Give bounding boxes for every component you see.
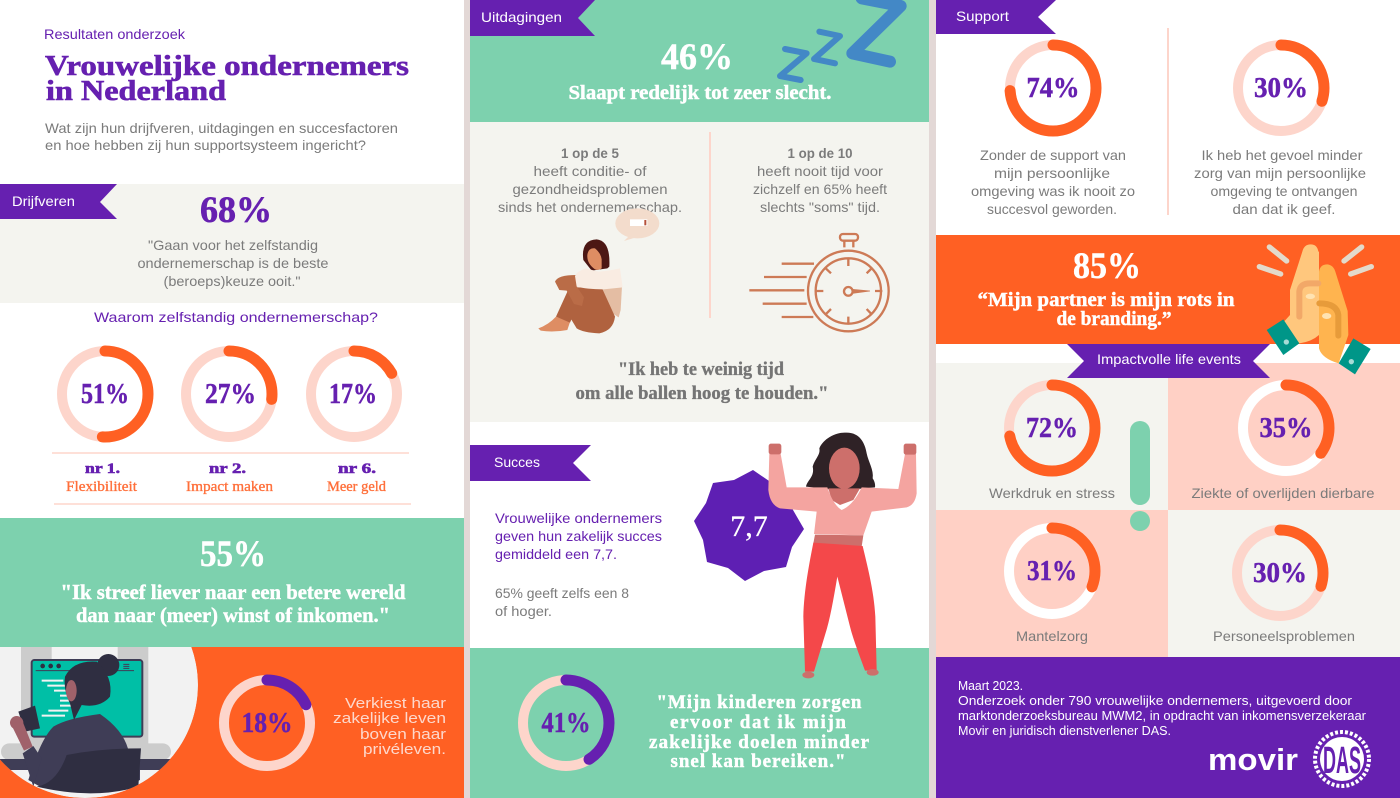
label: mantelzorg: Mantelzorg [1016,628,1088,644]
tag: Succes [470,445,591,481]
logo: movir: movir [1208,742,1298,777]
donut: 74% [1010,45,1096,131]
panel: drijfveren [0,184,464,303]
quote: rots in de branding: “Mijn partner is mijn rots in [978,289,1234,311]
text: 65% [495,585,629,619]
quote: ballen hoog: "Ik heb te weinig tijd [618,359,784,380]
text: minder zorg: Ik heb het gevoel minder [1202,147,1363,163]
text: verkiest zakelijk: Verkiest haar [345,696,446,712]
text: 1 op de 10: heeft nooit tijd voor [757,163,883,179]
subtitle: en hoe hebben zij hun supportsysteem ingericht? [45,137,366,153]
panel: kinderen [470,648,929,798]
text: onderzoeksverantwoording: Movir en juridisch dienstverlener DAS. [958,724,1171,738]
stat: 46%: 46% [661,37,733,78]
tag: Impactvolle life events [1067,344,1270,378]
quote: kinderen: zakelijke doelen minder [649,732,870,753]
donut: 72% [1009,385,1095,471]
quote: kinderen: snel kan bereiken." [670,751,846,772]
text: 1 op de 10 [753,145,887,215]
text: 1 op de 5 [498,145,682,215]
stat: 85%: 85% [1073,246,1141,287]
donut: 18% [224,680,310,766]
panel: waarom zelfstandig [0,303,464,518]
text: zonder support: mijn persoonlijke [994,165,1110,181]
donut: 72%: 72% [1026,412,1078,444]
panel: support [936,0,1400,235]
stat: 68%: 68% [200,190,272,231]
label: ziekte: Ziekte of overlijden dierbare [1192,485,1375,501]
title: in Nederland [46,76,226,107]
panel: uitdagingen slaap [470,0,929,122]
rank: meer geld: Meer geld [327,479,387,495]
text: zakelijk succes: geven hun zakelijk succes [495,528,662,544]
quote: ballen hoog: om alle ballen hoog te houden." [576,383,828,404]
tag: Drijfveren [0,184,117,219]
text: zakelijk succes: Vrouwelijke ondernemers [495,510,662,526]
donut: 31% [1009,528,1095,614]
illustration: woman at computer [0,647,198,798]
text: 1 op de 10: zichzelf en 65% heeft [753,181,887,197]
text: minder zorg [1194,147,1366,217]
donut: 41% [523,680,609,766]
panel: life events [936,344,1400,657]
text: onderzoeksverantwoording: Maart 2023. [958,679,1023,693]
panel: partner [936,235,1400,344]
rank: impact maken: Impact maken [186,479,274,495]
text: zonder support: omgeving was ik nooit zo [971,183,1135,199]
donut: 35%: 35% [1260,412,1312,444]
donut: 30% [1238,45,1324,131]
icon: high five [1259,244,1371,374]
badge: 7,7: 7,7 [730,510,768,543]
quote: ballen hoog [576,359,828,404]
donut: 27%: 27% [205,378,256,410]
text: 1 op de 10: 1 op de 10 [788,145,853,161]
text: 1 op de 5: gezondheidsproblemen [512,181,668,197]
text: 1 op de 5: 1 op de 5 [561,145,619,161]
quote: rots in de branding: de branding.” [1056,308,1172,330]
statement: Slaapt redelijk tot zeer slecht. [568,83,832,104]
text: zonder support: succesvol geworden. [987,201,1117,217]
panel: intro [0,0,464,184]
label: personeel: Personeelsproblemen [1213,628,1355,644]
tag: Uitdagingen: Uitdagingen [481,9,562,25]
text: minder zorg: dan dat ik geef. [1232,201,1336,217]
tag: Support [936,0,1056,34]
panel: colofon [936,657,1400,798]
donut: 30%: 30% [1253,557,1307,589]
badge: 7,7 [694,470,804,581]
subtitle: Wat zijn hun drijfveren, uitdagingen en succesfactoren [45,120,398,136]
logo: DAS [1315,732,1369,786]
donut: 35% [1243,385,1329,471]
text: 1 op de 5: heeft conditie- of [534,163,647,179]
tag: Succes: Succes [494,454,540,470]
text: onderzoeksverantwoording: Onderzoek onder 790 vrouwelijke ondernemers, uitgevoerd door [958,694,1352,708]
illustration: cheering woman [768,433,917,678]
icon: stopwatch [749,234,889,331]
text: zonder support [971,147,1135,217]
quote: "Ik streef liever naar een betere wereld [60,580,406,604]
quote: kinderen: ervoor dat ik mijn [670,712,846,733]
eyebrow: Resultaten onderzoek [44,26,186,42]
text: minder zorg: omgeving te ontvangen [1210,183,1358,199]
heading: Waarom zelfstandig ondernemerschap? [94,309,378,325]
donut: 27% [186,351,272,437]
panel: gezondheid en tijd [470,122,929,422]
text: zonder support: Zonder de support van [980,147,1126,163]
rank: meer geld: nr 6. [338,461,376,477]
panel: privéleven [0,647,464,798]
quote: beste keuze: ondernemerschap is de beste [138,255,329,271]
quote: kinderen [649,692,870,772]
quote: kinderen: "Mijn kinderen zorgen [656,692,862,713]
text: minder zorg: zorg van mijn persoonlijke [1194,165,1366,181]
illustration: tired woman [538,208,659,333]
text: onderzoeksverantwoording [958,679,1366,738]
donut: 51%: 51% [81,378,129,410]
donut: 31%: 31% [1027,555,1077,587]
tag: Drijfveren: Drijfveren [12,193,75,209]
text: verkiest zakelijk: boven haar [360,727,446,743]
tag: Support: Support [956,8,1009,24]
rank: meer geld [327,461,387,495]
icon: sleeping z's [780,0,901,80]
text: zakelijk succes [495,510,662,562]
text: 1 op de 10: slechts "soms" tijd. [760,199,880,215]
text: 1 op de 5: sinds het ondernemerschap. [498,199,682,215]
title: Vrouwelijke ondernemers [45,51,409,82]
text: 65%: of hoger. [495,603,552,619]
donut: 18%: 18% [242,707,292,739]
text: onderzoeksverantwoording: marktonderzoeksbureau MWM2, in opdracht van inkomensverzekeraar [958,709,1366,723]
donut: 17%: 17% [329,378,377,410]
donut: 17% [311,351,397,437]
rank: flexibiliteit: nr 1. [85,461,120,477]
quote: dan naar (meer) winst of inkomen." [76,603,390,627]
label: werkdruk: Werkdruk en stress [989,485,1115,501]
quote: beste keuze: "Gaan voor het zelfstandig [148,237,318,253]
quote: rots in de branding [978,289,1234,330]
donut: 41%: 41% [542,707,590,739]
text: verkiest zakelijk: privéleven. [363,742,446,758]
text: verkiest zakelijk [333,696,446,758]
subtitle [45,120,398,153]
rank: flexibiliteit [66,461,137,495]
donut: 30%: 30% [1254,72,1308,104]
donut: 74%: 74% [1026,72,1080,104]
donut: 30% [1237,530,1323,616]
panel: betere wereld [0,518,464,647]
donut: 51% [62,351,148,437]
quote: beste keuze: (beroeps)keuze ooit." [164,273,301,289]
title [45,51,409,107]
tag: Uitdagingen [470,0,595,36]
stat: 55%: 55% [200,534,266,575]
rank: impact maken [186,461,274,495]
text: verkiest zakelijk: zakelijke leven [333,711,446,727]
panel: succes [470,422,929,648]
text: 65%: 65% geeft zelfs een 8 [495,585,629,601]
text: zakelijk succes: gemiddeld een 7,7. [495,546,617,562]
rank: flexibiliteit: Flexibiliteit [66,479,137,495]
tag: Impactvolle life events: Impactvolle life events [1097,351,1241,367]
icon: exclamation mark [1130,421,1150,531]
quote [60,580,406,627]
quote: beste keuze [138,237,329,289]
rank: impact maken: nr 2. [209,461,246,477]
